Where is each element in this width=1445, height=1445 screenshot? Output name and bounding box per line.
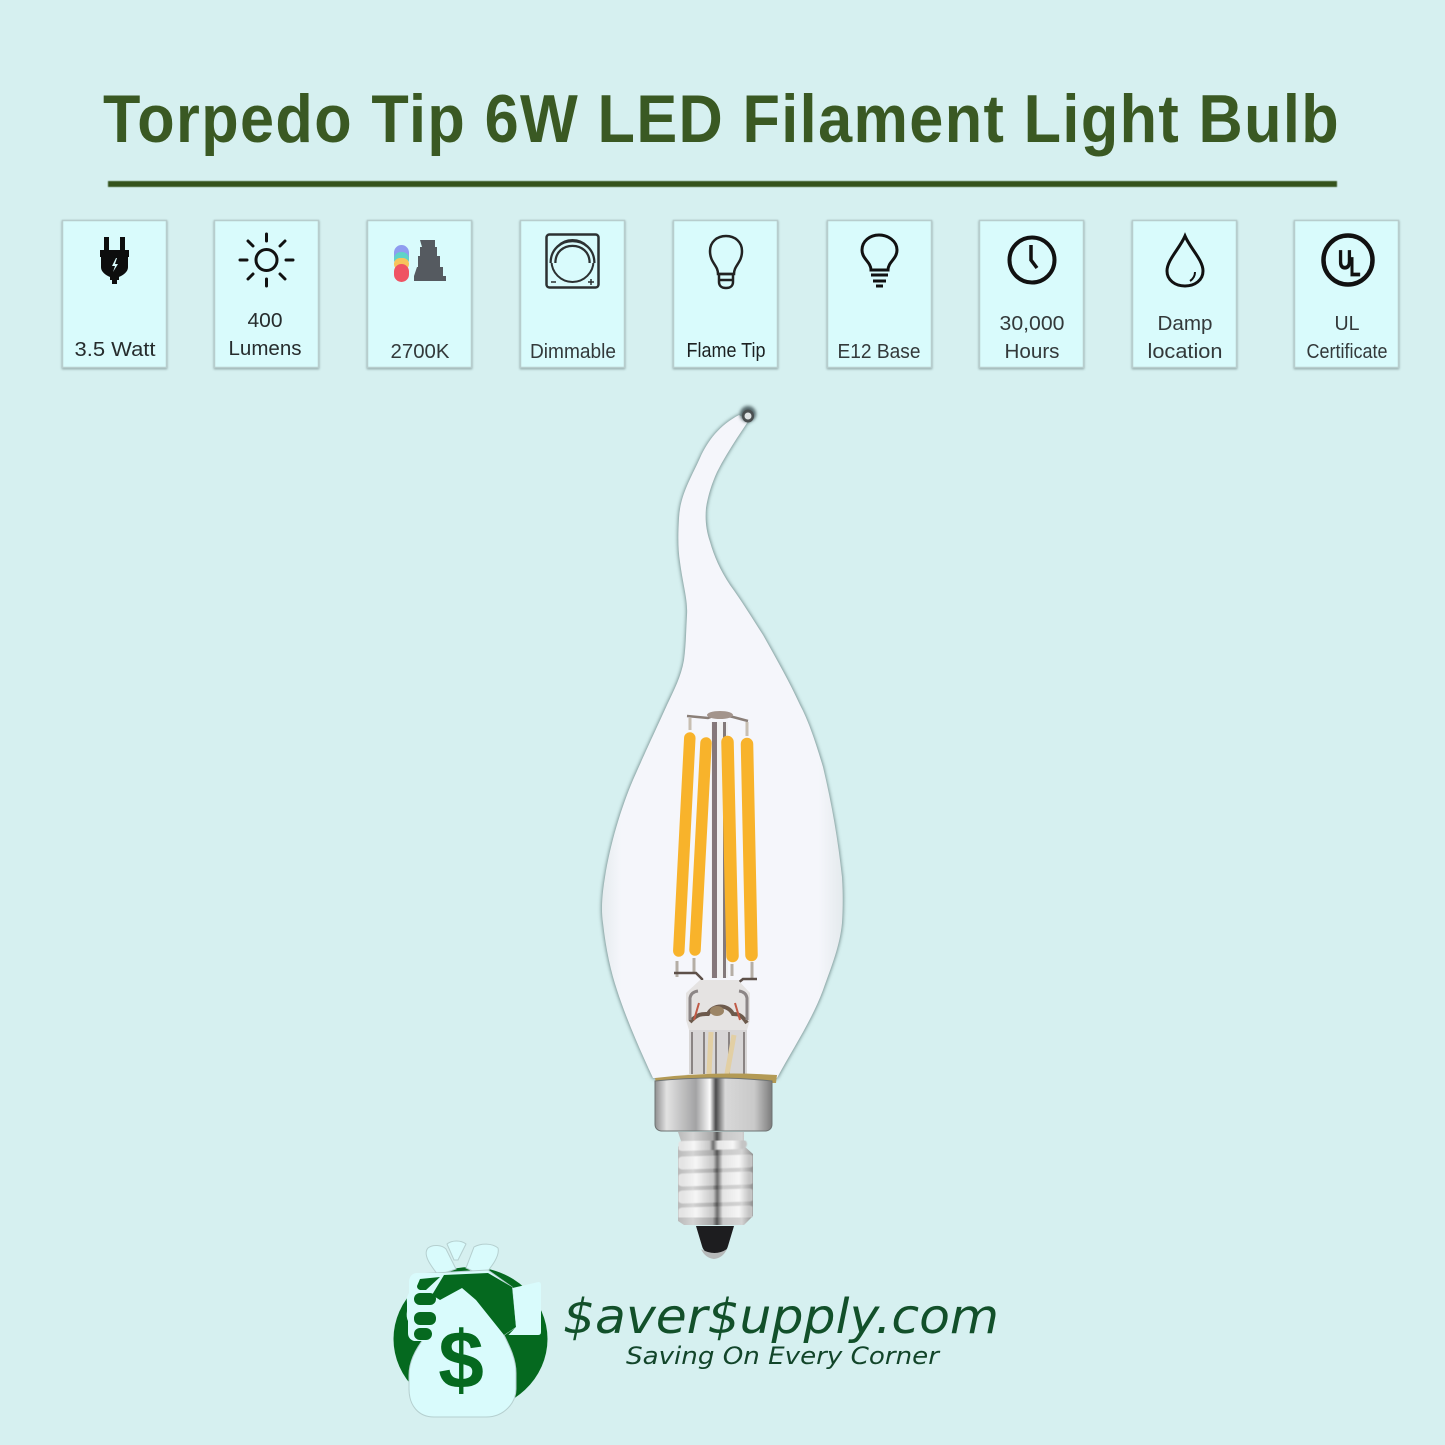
card: Damp location xyxy=(1132,220,1236,368)
card: 30,000 Hours: 30,000 xyxy=(1000,313,1064,335)
icon: bulb xyxy=(862,235,897,286)
top cross wire xyxy=(687,711,748,736)
card: Dimmable: Dimmable xyxy=(530,341,616,363)
dollar sign: $ xyxy=(438,1315,484,1406)
card: 2700K: 2700K xyxy=(390,341,450,363)
card: UL Certificate: UL xyxy=(1334,313,1360,335)
title: Torpedo Tip 6W LED Filament Light Bulb xyxy=(103,80,1339,157)
card: 30,000 Hours xyxy=(980,220,1084,368)
logo: money bag xyxy=(394,1241,548,1417)
icon: water drop xyxy=(1167,236,1203,286)
fingers xyxy=(414,1277,440,1340)
hand backing xyxy=(407,1273,444,1341)
card: Damp location: Damp xyxy=(1158,313,1212,335)
card: UL Certificate xyxy=(1294,220,1398,368)
icon: plug xyxy=(100,237,129,284)
bag knot lobes xyxy=(426,1241,498,1276)
green circle xyxy=(394,1267,548,1411)
bag body xyxy=(409,1270,516,1417)
icon: clock xyxy=(1010,238,1054,282)
card: Flame Tip: Flame Tip xyxy=(686,340,766,362)
icon: dimmer xyxy=(546,234,598,288)
icon: colour temperature xyxy=(394,240,446,282)
card: 30,000 Hours: Hours xyxy=(1004,341,1060,363)
bag neck opening xyxy=(432,1273,516,1335)
card: Damp location: location xyxy=(1148,341,1222,363)
card: 2700K xyxy=(368,220,472,368)
card: Flame Tip xyxy=(674,220,778,368)
icon: UL mark xyxy=(1324,236,1372,284)
icon: UL mark: U xyxy=(1338,245,1352,275)
contact tip xyxy=(696,1226,734,1259)
title underline xyxy=(108,181,1337,187)
glass stem xyxy=(686,980,750,1074)
spec cards row xyxy=(62,220,1398,368)
flame tip filament bulb xyxy=(602,406,843,1259)
lower wires xyxy=(674,958,757,995)
resin at base xyxy=(655,1074,777,1083)
screw thread base xyxy=(678,1132,753,1225)
metal collar xyxy=(655,1078,772,1131)
support rods xyxy=(711,722,728,978)
icon: sun xyxy=(240,234,293,286)
icon: UL mark: L xyxy=(1350,252,1360,282)
card: 400 Lumens: 400 xyxy=(248,310,282,332)
card: 400 Lumens xyxy=(214,220,318,368)
tagline: Saving On Every Corner xyxy=(626,1342,941,1370)
card: UL Certificate: Certificate xyxy=(1306,341,1388,363)
card: 3.5 Watt xyxy=(62,220,166,368)
card: Dimmable xyxy=(520,220,624,368)
filaments xyxy=(679,738,752,956)
brand name: $aver$upply.com xyxy=(563,1289,999,1345)
hand cuff xyxy=(508,1282,541,1335)
glass envelope xyxy=(602,415,843,1078)
card: 3.5 Watt: 3.5 Watt xyxy=(74,339,156,361)
card: E12 Base: E12 Base xyxy=(838,341,920,363)
glass tip xyxy=(740,406,756,422)
card: 400 Lumens: Lumens xyxy=(228,338,302,360)
card: E12 Base xyxy=(828,220,932,368)
icon: bulb outline xyxy=(710,236,742,288)
glass edge shadow xyxy=(602,415,843,1078)
